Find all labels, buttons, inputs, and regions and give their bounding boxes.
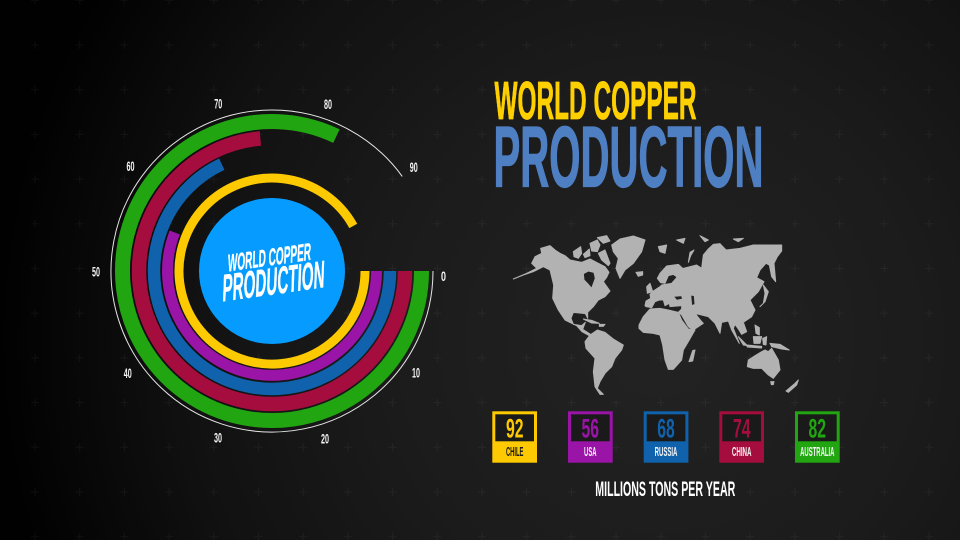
stat card: China: CHINA (732, 445, 752, 459)
scale labels: 90 (410, 160, 418, 175)
stat card: Australia (795, 411, 840, 463)
world map (513, 236, 798, 394)
scale ring (111, 110, 433, 432)
stat card: Chile (492, 411, 537, 463)
stat card: USA: USA (584, 445, 597, 459)
title: WORLD COPPER (494, 71, 696, 131)
stat card: Russia: 68 (657, 414, 675, 444)
scale labels: 20 (321, 432, 329, 446)
stat card: Australia: AUSTRALIA (800, 445, 834, 459)
center circle with label: WORLD COPPER (227, 239, 312, 278)
text: MILLIONS TONS PER YEAR (595, 477, 736, 501)
stat card: USA: 56 (582, 414, 599, 444)
ring: Australia 82 (122, 122, 421, 421)
scale labels: 30 (214, 430, 222, 446)
scale labels: 70 (214, 96, 222, 112)
stat card: China: 74 (733, 414, 750, 444)
scale labels: 80 (324, 97, 332, 112)
stat card: Chile: 92 (506, 414, 523, 444)
ring: Russia 68 (154, 164, 390, 389)
center circle with label (199, 198, 345, 344)
stat card: Russia: RUSSIA (655, 445, 677, 459)
stat card: Chile: CHILE (506, 445, 523, 459)
scale labels: 40 (124, 366, 132, 381)
center label (222, 237, 326, 311)
ring: USA 56 (168, 232, 376, 375)
stat card: Australia: 82 (809, 414, 826, 444)
scale labels: 60 (126, 159, 134, 174)
stat card: China (719, 411, 764, 463)
scale labels (92, 96, 446, 446)
title (494, 71, 764, 206)
scale labels: 50 (92, 264, 100, 280)
text: PRODUCTION (222, 253, 325, 311)
ring: Chile 92 (179, 178, 365, 364)
stat card: USA (568, 411, 613, 463)
radial chart (111, 110, 433, 432)
scale labels: 10 (412, 366, 420, 380)
stat card: Russia (644, 411, 688, 463)
scale labels: 0 (441, 269, 446, 284)
ring: China 74 (139, 138, 405, 404)
